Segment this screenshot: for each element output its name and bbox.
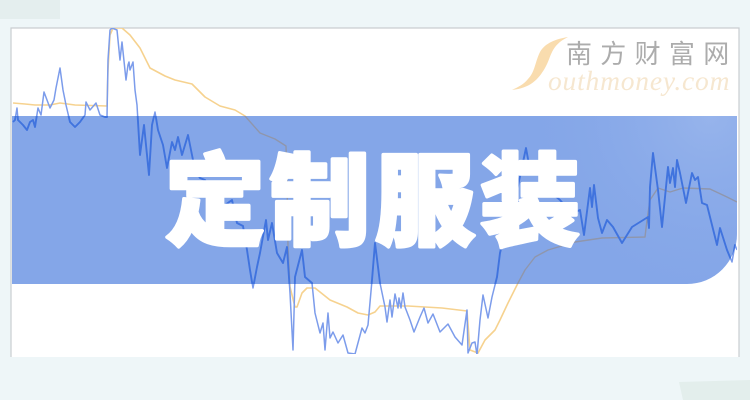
title: 定制服装 xyxy=(165,147,585,259)
band highlight xyxy=(12,116,737,284)
logo swoosh xyxy=(512,37,568,90)
logo chinese name: 南方财富网 xyxy=(566,39,738,69)
line chart inside band xyxy=(12,116,737,284)
logo latin name: outhmoney.com xyxy=(548,65,730,96)
logo: southmoney xyxy=(512,37,738,96)
blue title band xyxy=(12,116,737,284)
page background corner patch: top left xyxy=(0,0,60,19)
page background corner patch: bottom right xyxy=(679,380,750,400)
chart panel xyxy=(11,28,739,357)
chart frame xyxy=(11,28,739,357)
line chart over white background xyxy=(13,28,737,355)
